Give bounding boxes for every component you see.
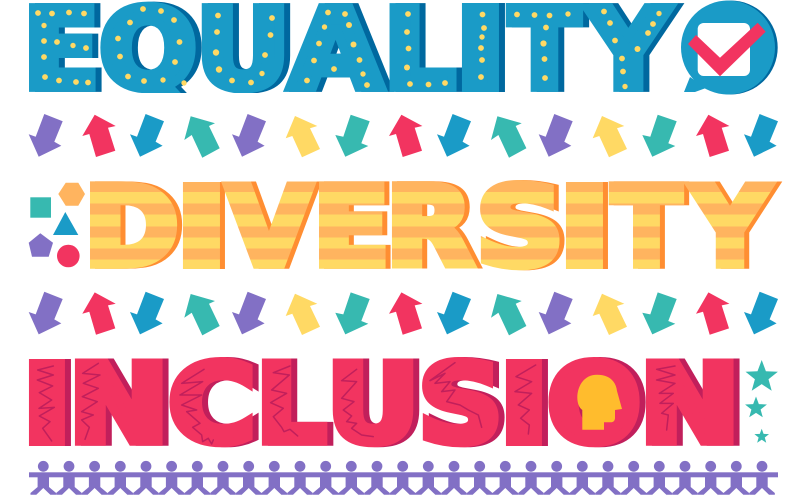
heading: INCLUSION: S: [424, 343, 509, 468]
purple pentagon: [29, 233, 53, 257]
arrow: yellow up: [593, 116, 627, 157]
icon: three teal stars: [745, 360, 778, 443]
arrow: blue down: [437, 114, 471, 157]
arrow: red up: [389, 292, 422, 335]
blue triangle: [53, 212, 78, 235]
heading: DIVERSITY: T: [617, 165, 686, 291]
arrow: teal down: [642, 292, 677, 334]
arrow: teal down: [642, 115, 677, 157]
heading: INCLUSION: S: [418, 343, 503, 468]
arrow row 2: [29, 292, 778, 335]
teal square: [30, 197, 51, 218]
heading: DIVERSITY: I: [559, 166, 610, 291]
heading: INCLUSION: C: [168, 342, 255, 467]
heading: INCLUSION: I: [505, 342, 555, 467]
heading: INCLUSION: L: [256, 342, 326, 467]
heading: INCLUSION: I: [22, 342, 72, 467]
heading: DIVERSITY: Y: [690, 166, 770, 291]
heading: DIVERSITY: I: [176, 166, 227, 291]
heading: INCLUSION: O: [547, 342, 641, 467]
arrow: teal down: [335, 292, 370, 334]
heading: INCLUSION: C: [174, 342, 261, 467]
heading: DIVERSITY: V: [232, 165, 316, 291]
icon: speech bubble with check mark: [681, 0, 778, 94]
arrow row 1: [29, 114, 778, 158]
heading: DIVERSITY: V: [227, 165, 311, 291]
heading: DIVERSITY: E: [318, 164, 394, 290]
heading: INCLUSION: L: [262, 342, 332, 467]
arrow: purple down: [29, 114, 63, 157]
icon: cluster of geometric shapes: [29, 183, 85, 267]
arrow: blue down: [130, 292, 164, 334]
heading: DIVERSITY: D: [84, 166, 178, 291]
arrow: red up: [389, 115, 422, 157]
heading: EQUALITY: [29, 2, 684, 93]
arrow: red up: [82, 115, 116, 157]
heading: DIVERSITY: R: [391, 165, 478, 290]
arrow: red up: [696, 292, 729, 335]
heading: DIVERSITY: E: [313, 164, 389, 290]
heading: DIVERSITY: D: [89, 166, 183, 291]
arrow: yellow up: [286, 294, 320, 335]
yellow light dots on EQUALITY: [35, 6, 662, 89]
heading: INCLUSION: N: [646, 342, 746, 467]
heading: DIVERSITY: S: [481, 166, 569, 291]
heading: INCLUSION: U: [327, 343, 419, 468]
heading: INCLUSION: U: [333, 343, 425, 468]
arrow: red up: [82, 292, 116, 335]
heading: INCLUSION: I: [28, 342, 78, 467]
arrow: teal down: [335, 115, 370, 157]
arrow: yellow up: [593, 294, 627, 335]
orange hexagon: [58, 183, 85, 206]
arrow: teal up: [184, 116, 220, 158]
arrow: blue down: [437, 292, 471, 334]
arrow: purple down: [232, 292, 266, 334]
arrow: red up: [696, 115, 729, 157]
arrow: yellow up: [286, 116, 320, 157]
arrow: teal up: [491, 116, 526, 158]
arrow: teal up: [491, 294, 526, 335]
heading: DIVERSITY: I: [564, 166, 615, 291]
arrow: purple down: [539, 292, 573, 334]
heading: DIVERSITY: T: [612, 165, 681, 291]
heading: INCLUSION: I: [499, 342, 549, 467]
arrow: blue down: [744, 114, 778, 157]
arrow: blue down: [130, 114, 164, 157]
heading: DIVERSITY: R: [386, 165, 473, 290]
heading: INCLUSION: [22, 342, 746, 468]
arrow: teal up: [184, 294, 220, 335]
scribbles on INCLUSION left letters: [37, 363, 373, 444]
arrow: purple down: [539, 114, 573, 157]
heading: DIVERSITY: Y: [695, 166, 775, 291]
paper-chain row of people: [29, 461, 778, 495]
icon: head silhouette inside O: [577, 375, 622, 430]
heading: DIVERSITY: I: [181, 166, 232, 291]
heading: INCLUSION: N: [640, 342, 740, 467]
heading: INCLUSION: N: [69, 342, 169, 467]
scribbles on INCLUSION right letters: [430, 363, 675, 434]
heading: DIVERSITY: S: [476, 166, 564, 291]
arrow: blue down: [744, 292, 778, 334]
heading: INCLUSION: N: [75, 342, 175, 467]
red circle: [57, 245, 80, 267]
heading: DIVERSITY: [84, 164, 775, 291]
arrow: purple down: [232, 114, 266, 157]
heading: INCLUSION: O: [553, 342, 647, 467]
arrow: purple down: [29, 292, 63, 334]
